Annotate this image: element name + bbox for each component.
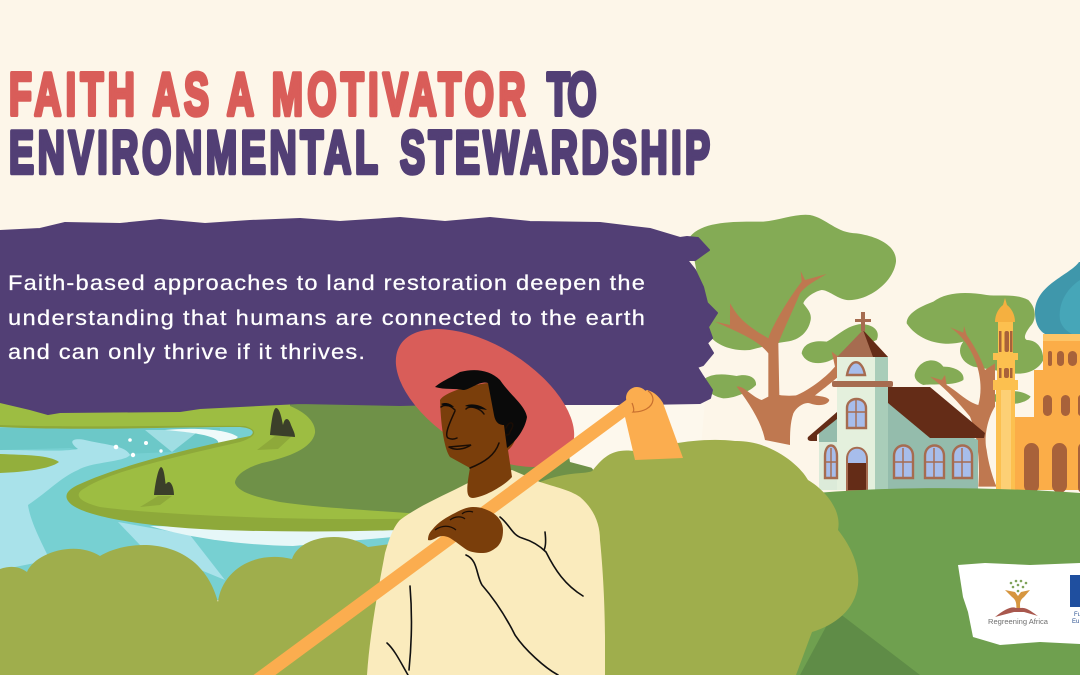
left island — [0, 454, 59, 473]
mosque cornice — [1043, 334, 1080, 341]
small tree behind church — [793, 324, 878, 402]
shirt folds — [387, 517, 583, 675]
logo: Regreening Africa tree — [995, 580, 1038, 617]
church left roof — [808, 412, 837, 441]
minaret — [993, 298, 1018, 490]
title line 1 red: FAITH AS A MOTIVATOR — [9, 59, 525, 128]
title line 1 purple: TO — [547, 59, 597, 128]
hoe blade — [625, 390, 683, 460]
dark trees with shadows — [140, 408, 295, 507]
logo panel — [958, 563, 1080, 645]
church door — [847, 448, 867, 490]
title line 2 first word: ENVIRONMENTAL — [9, 117, 378, 186]
shirt — [367, 470, 605, 675]
logo label: Regreening Africa — [988, 619, 1048, 626]
church main roof — [888, 387, 985, 438]
mosque dome — [1035, 262, 1080, 334]
mosque walls — [1015, 340, 1080, 490]
hill shadow slope — [800, 610, 920, 675]
church windows — [825, 362, 972, 478]
banner text line 1: Faith-based approaches to land restoration deepen the — [8, 271, 645, 295]
hand — [428, 507, 503, 553]
dark green hill — [235, 404, 595, 514]
big tree — [690, 215, 896, 445]
river landscape — [0, 400, 595, 600]
banner text line 3: and can only thrive if it thrives. — [8, 340, 365, 364]
church band — [832, 381, 893, 387]
title line 2 second word: STEWARDSHIP — [400, 117, 710, 186]
torn paper behind hoe — [560, 400, 705, 470]
farmer — [255, 301, 683, 675]
title — [9, 59, 710, 186]
EU funding label: Eu — [1072, 619, 1079, 625]
church tower — [837, 357, 888, 490]
church tower roof — [837, 330, 888, 357]
land grass — [0, 400, 430, 519]
hair — [435, 370, 527, 448]
church cross — [855, 312, 871, 331]
banner text — [8, 271, 645, 364]
foreground bushes — [0, 440, 858, 675]
hat — [373, 301, 597, 495]
church body — [819, 397, 978, 490]
mosque windows — [1024, 351, 1080, 493]
hoe knob — [626, 387, 653, 412]
EU flag — [1070, 575, 1080, 607]
neck and face — [440, 383, 518, 498]
mosque — [993, 262, 1080, 493]
face lines — [441, 405, 513, 468]
water — [0, 425, 430, 600]
land edge — [0, 400, 430, 532]
pale water — [0, 439, 130, 570]
church — [808, 312, 985, 490]
hoe pole — [255, 403, 633, 675]
second tree — [907, 293, 1043, 487]
right hill — [760, 488, 1080, 675]
banner text line 2: understanding that humans are connected to the earth — [8, 306, 645, 330]
upper teal water — [0, 428, 220, 455]
purple banner — [0, 218, 717, 414]
water sparkles — [114, 438, 163, 457]
